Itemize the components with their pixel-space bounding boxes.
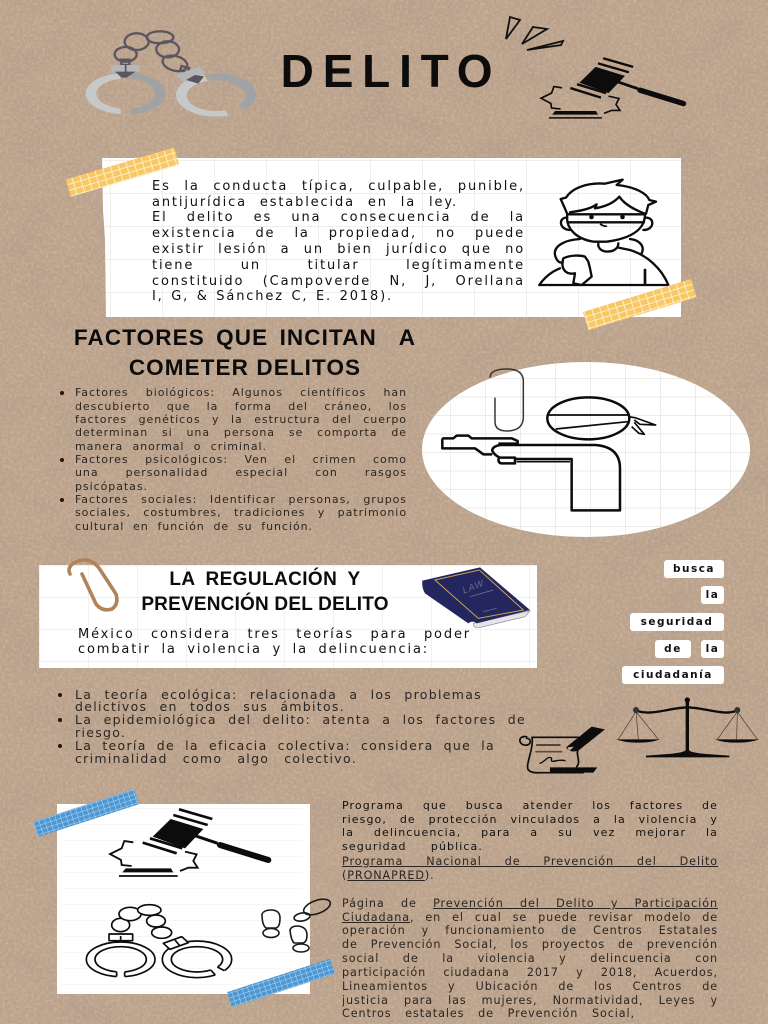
definition text: tiene un titular legítimamente (152, 258, 525, 273)
icon: scales of justice (616, 697, 760, 758)
text: página de prevención: Página de Prevención del Delito y Participación (342, 897, 718, 910)
text: página de prevención: justicia para las mujeres, Normatividad, Leyes y (342, 994, 718, 1007)
definition text: constituido (Campoverde N, J, Orellana (152, 274, 525, 289)
tags: busca la seguridad de la ciudadanía: la (706, 589, 719, 601)
tags: busca la seguridad de la ciudadanía: de (664, 643, 682, 655)
illustration: blindfolded figure with gun on white circle (422, 362, 750, 537)
tags: busca la seguridad de la ciudadanía: seguridad (641, 616, 713, 628)
heading: regulación: LA REGULACIÓN Y (169, 569, 361, 590)
list: teorías: delictivos en todos sus ámbitos. (75, 699, 345, 714)
tags: busca la seguridad de la ciudadanía: ciudadanía (633, 669, 713, 681)
text: página de prevención: de Prevención Social, los proyectos de prevención (342, 938, 718, 951)
definition text: existir lesión a un bien jurídico que no (152, 242, 525, 257)
icon: law book (422, 567, 531, 628)
card background (39, 565, 537, 668)
heading: regulación: PREVENCIÓN DEL DELITO (141, 594, 389, 615)
text: página de prevención: Ciudadana, en el cual se puede revisar modelo de (342, 911, 718, 924)
list: factores: Factores sociales: Identificar personas, grupos (75, 493, 407, 506)
yellow washi tape (66, 148, 696, 330)
text: programa PRONAPRED: Programa que busca atender los factores de (342, 799, 718, 812)
icon: law book: LAW (462, 577, 485, 597)
title: DELITO (281, 45, 501, 97)
icon: brown paperclip (67, 558, 119, 612)
tags: busca la seguridad de la ciudadanía: la (706, 643, 719, 655)
definition text: antijurídica establecida en la ley. (152, 195, 458, 210)
icon: grey handcuffs (86, 30, 256, 117)
list: teorías: La epidemiológica del delito: atenta a los factores de (75, 712, 526, 727)
icon: masked person (538, 178, 670, 286)
list: factores: una personalidad especial con rasgos (75, 466, 407, 479)
list: factores: Factores biológicos: Algunos científicos han (75, 386, 407, 399)
definition text: existencia de la propiedad, no puede (152, 226, 525, 241)
icon: gavel top (539, 57, 686, 119)
icon: figure (442, 397, 656, 510)
list: factores: determinan si una persona se comporta de (75, 426, 407, 439)
intro text: combatir la violencia y la delincuencia: (78, 642, 429, 657)
text: programa PRONAPRED: la delincuencia, para a su vez mejorar la (342, 826, 718, 839)
definition text: El delito es una consecuencia de la (152, 210, 525, 225)
list: teorías: La teoría ecológica: relacionada a los problemas (75, 687, 482, 702)
intro text: México considera tres teorías para poder (78, 627, 471, 642)
list: factores: descubierto que la forma del cráneo, los (75, 400, 407, 413)
tags: busca la seguridad de la ciudadanía: busca (673, 563, 715, 575)
list: factores: manera anormal o criminal. (75, 440, 267, 453)
text: página de prevención: operación y funcionamiento de Centros Estatales (342, 924, 718, 937)
definition text: Es la conducta típica, culpable, punible, (152, 179, 525, 194)
list: factores: factores genéticos y la estructura del cuerpo (75, 413, 407, 426)
list: teorías: criminalidad como algo colectivo. (75, 751, 357, 766)
list: factores: Factores psicológicos: Ven el crimen como (75, 453, 407, 466)
icon: scroll and pen (519, 726, 605, 774)
text: programa PRONAPRED: riesgo, de protección vinculados a la violencia y (342, 813, 718, 826)
text: página de prevención: social de la violencia y delincuencia con (342, 952, 718, 965)
text: página de prevención: Lineamientos y Ubicación de los Centros de (342, 980, 718, 993)
definition text: I, G, & Sánchez C, E. 2018). (152, 289, 393, 304)
text: programa PRONAPRED: seguridad pública. (342, 840, 483, 853)
card background (102, 158, 681, 317)
list: teorías: La teoría de la eficacia colectiva: considera que la (75, 738, 495, 753)
list: teorías: riesgo. (75, 725, 126, 740)
list: factores: cultural en función de su función. (75, 520, 313, 533)
text: programa PRONAPRED: Programa Nacional de Prevención del Delito (342, 855, 718, 868)
text: programa PRONAPRED: (PRONAPRED). (342, 869, 435, 882)
list: factores: sociales, costumbres, tradiciones y patrimonio (75, 506, 407, 519)
heading: factores: COMETER DELITOS (129, 355, 361, 380)
text: página de prevención: participación ciudadana 2017 y 2018, Acuerdos, (342, 966, 718, 979)
icon: paperclip (490, 369, 523, 431)
text: página de prevención: Centros estatales de Prevención Social, (342, 1007, 635, 1020)
list: factores: psicópatas. (75, 480, 148, 493)
icon: three accent marks (505, 16, 565, 51)
heading: factores: FACTORES QUE INCITAN A (74, 325, 416, 350)
